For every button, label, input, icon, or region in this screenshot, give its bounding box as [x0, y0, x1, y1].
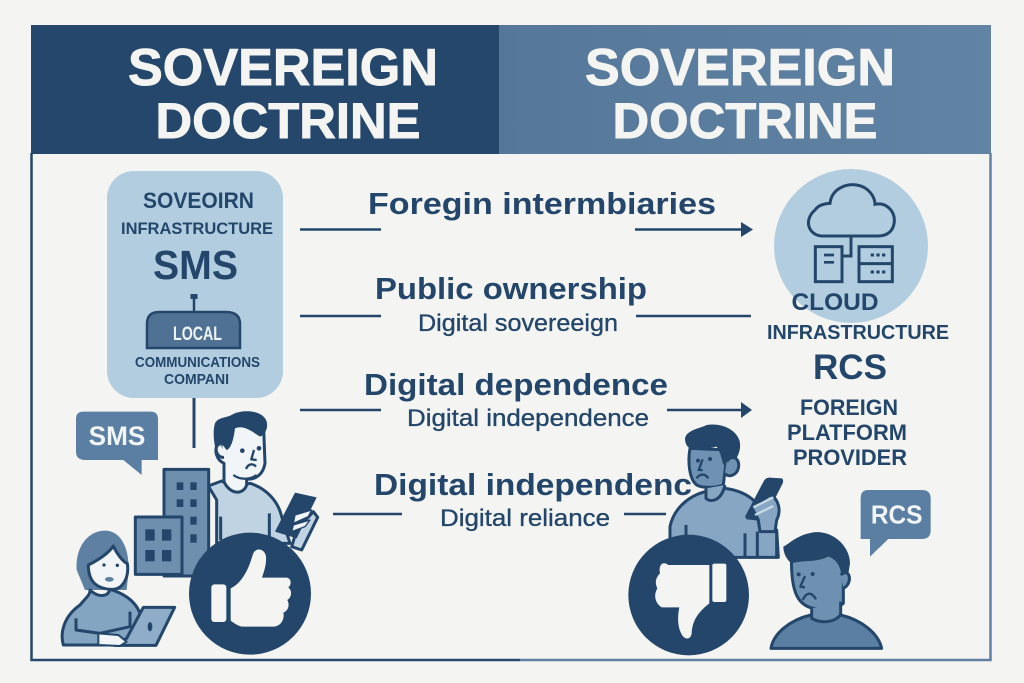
panel: sovereign infrastructure [107, 171, 283, 398]
panel: sovereign infrastructure: SOVEOIRN [143, 188, 254, 213]
row 2: public ownership [300, 271, 751, 337]
panel: cloud infrastructure: PROVIDER [793, 445, 907, 470]
row 1: foreign intermediaries: Foregin intermbiaries [368, 186, 716, 221]
panel: cloud infrastructure: RCS [813, 348, 887, 387]
left illustration group [62, 411, 318, 655]
bubble: SMS [76, 412, 158, 475]
panel: sovereign infrastructure: INFRASTRUCTURE [121, 219, 273, 238]
panel: sovereign infrastructure: COMMUNICATIONS [135, 354, 260, 371]
icon: thumbs up [189, 533, 311, 655]
header: right: DOCTRINE [612, 93, 878, 149]
row 4: digital independence: Digital independenc [374, 467, 692, 502]
icon: local router: LOCAL [173, 324, 222, 345]
panel: sovereign infrastructure: COMPANI [164, 371, 229, 388]
icon: thumbs down [628, 535, 749, 655]
panel: cloud infrastructure [767, 169, 949, 470]
row 3: digital dependence: Digital independence [407, 405, 649, 432]
bubble: SMS: SMS [89, 421, 145, 451]
row 2: public ownership: Digital sovereeign [418, 310, 618, 337]
person: worried man [771, 532, 882, 648]
person: man with phone [208, 411, 318, 550]
row 3: digital dependence: Digital dependence [364, 367, 668, 402]
person: woman with laptop [62, 531, 175, 646]
header: left [31, 25, 499, 154]
icon: buildings [135, 469, 209, 576]
row 3: digital dependence [300, 367, 752, 432]
icon: cloud and servers [808, 185, 894, 282]
panel: cloud infrastructure: FOREIGN [800, 395, 898, 420]
header: left: DOCTRINE [156, 93, 420, 149]
connector: panel to people [192, 398, 196, 448]
header: right [499, 25, 991, 154]
row 4: digital independence: Digital reliance [440, 505, 610, 532]
row 4: digital independence [333, 467, 692, 532]
row 2: public ownership: Public ownership [375, 271, 647, 306]
panel: cloud infrastructure: PLATFORM [787, 420, 907, 445]
panel: cloud infrastructure: INFRASTRUCTURE [767, 322, 949, 344]
panel: cloud infrastructure: CLOUD [792, 289, 878, 316]
bubble: RCS [861, 490, 931, 557]
panel: sovereign infrastructure: SMS [153, 242, 238, 288]
outer frame [31, 153, 991, 660]
person: man with phone [670, 424, 783, 557]
header: right: SOVEREIGN [585, 39, 895, 97]
right illustration group [628, 424, 931, 655]
header: left: SOVEREIGN [128, 39, 438, 97]
bubble: RCS: RCS [871, 499, 922, 529]
row 1: foreign intermediaries [300, 186, 753, 237]
icon: local router [147, 294, 240, 348]
